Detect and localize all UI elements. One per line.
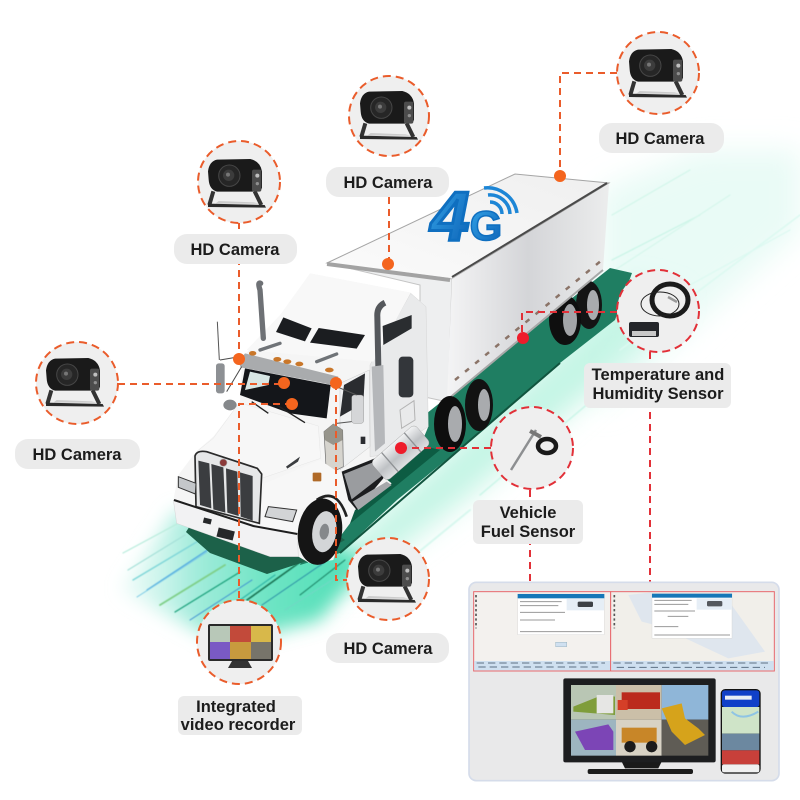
mirrors xyxy=(216,322,364,423)
cab roof xyxy=(247,273,411,362)
mid road haze xyxy=(330,285,680,590)
trailer roof xyxy=(327,174,609,279)
callout: integrated video recorder: Integrated xyxy=(196,698,276,716)
hood xyxy=(197,403,321,478)
callout: left HD camera: HD Camera xyxy=(33,446,122,464)
software screen left xyxy=(474,592,611,671)
visor xyxy=(238,353,338,386)
trailer roof edge xyxy=(452,183,607,277)
icon: cable and sensor box xyxy=(629,284,688,337)
camera feed tiles xyxy=(571,685,708,756)
callout: upper left HD camera xyxy=(174,141,297,264)
callout: vehicle fuel sensor: Fuel Sensor xyxy=(481,523,576,541)
icon: camera xyxy=(360,91,418,140)
callout: temperature and humidity sensor xyxy=(584,270,731,408)
trailer front face xyxy=(327,263,452,402)
callout: upper left HD camera: HD Camera xyxy=(191,241,280,259)
trailer side marker strip xyxy=(455,260,602,380)
smartphone xyxy=(721,689,761,774)
horns xyxy=(260,343,337,362)
trailer xyxy=(327,174,609,452)
callout: integrated video recorder: video recorder xyxy=(181,716,296,734)
callout: top right HD camera xyxy=(599,32,724,153)
callout: left HD camera xyxy=(15,342,140,469)
icon: mini recorder monitor xyxy=(208,624,273,668)
sleeper side xyxy=(370,293,428,457)
icon: fuel probe xyxy=(511,430,556,470)
right exhaust stack and shield xyxy=(377,303,385,367)
hood side vent xyxy=(286,457,300,469)
red sensor lines xyxy=(401,312,650,582)
panel: monitoring platform and displays xyxy=(469,582,779,781)
headlights xyxy=(178,477,196,494)
recorder monitor xyxy=(563,678,716,774)
trailer side wall xyxy=(447,184,609,400)
callout: bottom HD camera: HD Camera xyxy=(344,640,433,658)
icon: camera xyxy=(46,358,104,407)
white body silhouette xyxy=(173,273,428,563)
truck ground shadow xyxy=(186,268,632,574)
callout: temperature and humidity sensor: Temperature and xyxy=(592,366,724,384)
4G logo: G xyxy=(470,202,502,249)
sleeper windows xyxy=(383,315,412,345)
4G logo: 4 xyxy=(429,177,469,255)
callout: bottom HD camera xyxy=(326,538,449,663)
air cleaner xyxy=(324,424,343,472)
icon: camera xyxy=(208,159,266,208)
windshield xyxy=(240,368,331,418)
connector lines xyxy=(118,73,650,600)
callout: vehicle fuel sensor: Vehicle xyxy=(500,504,556,522)
tractor rear wheels xyxy=(434,379,493,452)
callout: top right HD camera: HD Camera xyxy=(616,130,705,148)
connection dots xyxy=(233,170,566,454)
software screen right xyxy=(611,592,774,671)
callout: temperature and humidity sensor: Humidity Sensor xyxy=(592,385,724,403)
callout: integrated video recorder xyxy=(178,600,302,735)
icon: camera xyxy=(358,554,416,603)
truck tractor xyxy=(173,273,431,568)
bumper xyxy=(173,500,298,557)
steps xyxy=(342,455,392,510)
amber marker lights xyxy=(249,351,334,372)
callout: top centre HD camera xyxy=(326,76,449,197)
orange camera lines xyxy=(118,73,617,600)
near road glow xyxy=(120,510,370,645)
left exhaust stack xyxy=(259,283,263,338)
callout: top centre HD camera: HD Camera xyxy=(344,174,433,192)
roof windows xyxy=(276,317,312,341)
fuel tank xyxy=(370,424,431,481)
trailer rear wheels xyxy=(549,281,602,345)
icon: camera xyxy=(629,49,687,98)
front wheel xyxy=(294,496,346,568)
door xyxy=(340,370,370,470)
wifi arcs xyxy=(484,188,517,214)
grille xyxy=(195,451,262,523)
wipers xyxy=(252,402,305,423)
far road haze xyxy=(600,150,800,410)
callout: vehicle fuel sensor xyxy=(473,407,583,544)
4G logo xyxy=(429,177,517,255)
road light streaks xyxy=(120,150,800,645)
fender xyxy=(257,460,352,537)
